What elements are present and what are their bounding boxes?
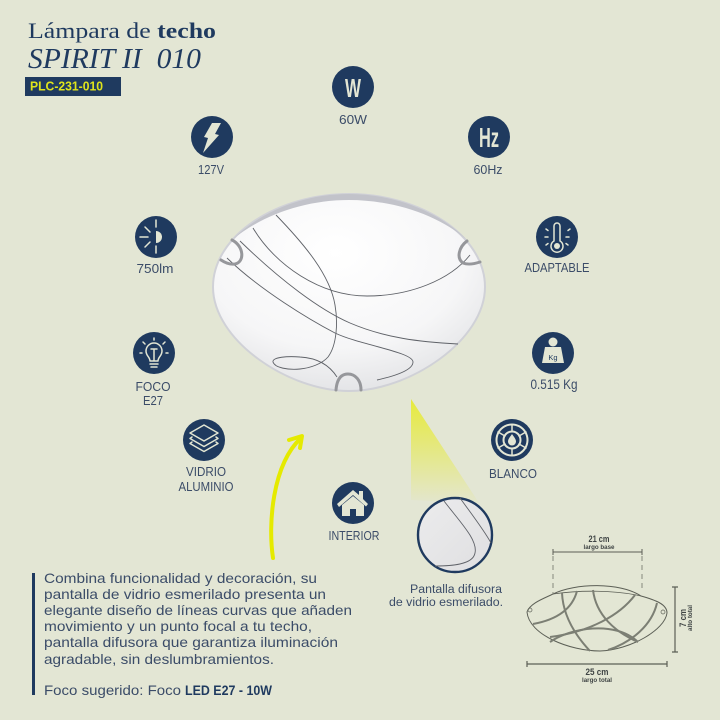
title: SPIRIT II 010 xyxy=(28,44,201,75)
lamp rim highlight xyxy=(232,194,467,240)
product code badge: PLC-231-010 xyxy=(30,80,103,94)
spec: luminous flux 750lm xyxy=(135,216,177,276)
spec: indoor use xyxy=(328,482,380,543)
spec: colour white xyxy=(489,419,537,481)
detail circle: frosted glass xyxy=(418,498,492,572)
description text block xyxy=(32,570,352,698)
detail caption: de vidrio esmerilado. xyxy=(389,597,503,609)
spec: weight 0.515 Kg xyxy=(530,332,578,392)
description text block: elegante diseño de líneas curvas que añaden xyxy=(44,602,352,618)
spec: frequency 60Hz xyxy=(468,116,510,177)
description text block: Combina funcionalidad y decoración, su xyxy=(44,570,317,586)
spec: colour white: BLANCO xyxy=(489,466,537,481)
title: Lámpara de techo xyxy=(28,18,216,43)
description text block: agradable, sin deslumbramientos. xyxy=(44,651,274,667)
detail caption: Pantalla difusora xyxy=(410,584,503,596)
product code badge xyxy=(25,77,121,96)
total height 7 cm xyxy=(672,587,694,652)
spec: power 60W xyxy=(332,66,374,127)
total width 25 cm xyxy=(527,661,667,684)
spec: bulb FOCO E27 xyxy=(133,332,175,408)
lamp side outline xyxy=(527,586,667,651)
spec: voltage 127V: 127V xyxy=(198,162,224,177)
spec: temperature adaptable: ADAPTABLE xyxy=(524,260,590,275)
spec: power 60W: W xyxy=(345,73,361,103)
description text block: pantalla de vidrio esmerilado presenta un xyxy=(44,586,326,602)
spec: weight 0.515 Kg: 0.515 Kg xyxy=(530,377,578,392)
spec: indoor use: INTERIOR xyxy=(328,528,380,543)
total height 7 cm: alto total xyxy=(687,605,694,631)
spec: bulb FOCO E27: E27 xyxy=(143,393,163,408)
spec: material glass and aluminium xyxy=(178,419,234,494)
lamp metal clips xyxy=(221,240,480,390)
spec: frequency 60Hz: Hz xyxy=(479,122,499,153)
spec: power 60W: 60W xyxy=(339,112,368,127)
total width 25 cm: largo total xyxy=(582,677,612,684)
lamp curved lines xyxy=(227,215,470,380)
total height 7 cm: 7 cm xyxy=(678,609,688,627)
spec: luminous flux 750lm: 750lm xyxy=(136,261,174,276)
description text block: pantalla difusora que garantiza iluminación xyxy=(44,634,338,650)
description text block: Foco sugerido: Foco xyxy=(44,682,181,698)
base width 21 cm xyxy=(553,534,642,594)
dimension diagram xyxy=(527,534,694,684)
spec: material glass and aluminium: VIDRIO xyxy=(186,464,226,479)
total width 25 cm: 25 cm xyxy=(586,667,608,677)
spec: weight 0.515 Kg: Kg xyxy=(548,353,558,362)
lamp photo xyxy=(213,194,485,391)
spec: frequency 60Hz: 60Hz xyxy=(474,162,502,177)
description text block: movimiento y un punto focal a tu techo, xyxy=(44,618,312,634)
spec: bulb FOCO E27: FOCO xyxy=(136,379,170,394)
detail caption xyxy=(389,584,503,609)
yellow arrow pointing to lamp xyxy=(271,436,302,558)
spec: material glass and aluminium: ALUMINIO xyxy=(178,479,234,494)
base width 21 cm: largo base xyxy=(584,544,615,551)
spec: voltage 127V xyxy=(191,116,233,177)
yellow light cone to detail circle xyxy=(411,399,479,503)
title xyxy=(28,18,216,75)
spec: temperature adaptable xyxy=(524,216,590,275)
base width 21 cm: 21 cm xyxy=(588,534,610,544)
description text block: LED E27 - 10W xyxy=(185,682,273,698)
